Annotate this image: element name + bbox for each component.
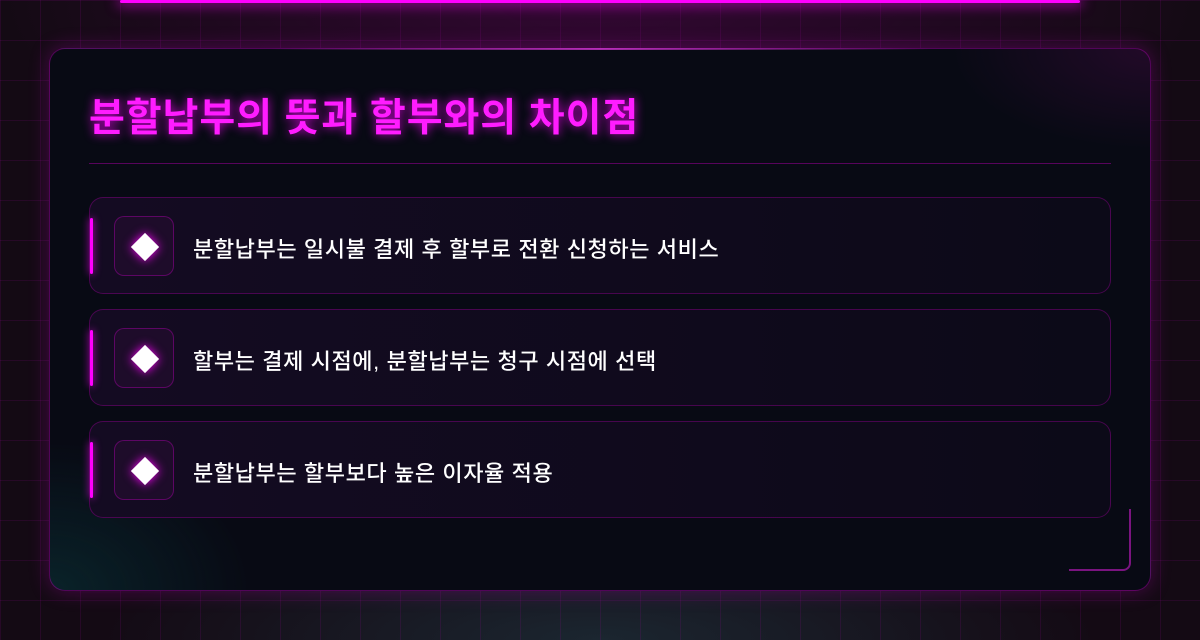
card panel — [49, 48, 1151, 591]
icon: diamond — [114, 216, 174, 276]
title: 분할납부의 뜻과 할부와의 차이점 — [89, 97, 639, 140]
text 3: 분할납부는 할부보다 높은 이자율 적용 — [193, 461, 553, 486]
text 2: 할부는 결제 시점에, 분할납부는 청구 시점에 선택 — [193, 349, 657, 374]
text 1: 분할납부는 일시불 결제 후 할부로 전환 신청하는 서비스 — [193, 237, 719, 262]
item 3 — [89, 421, 1111, 518]
icon: diamond — [114, 440, 174, 500]
icon: diamond — [114, 328, 174, 388]
item 1 — [89, 197, 1111, 294]
item 2 — [89, 309, 1111, 406]
